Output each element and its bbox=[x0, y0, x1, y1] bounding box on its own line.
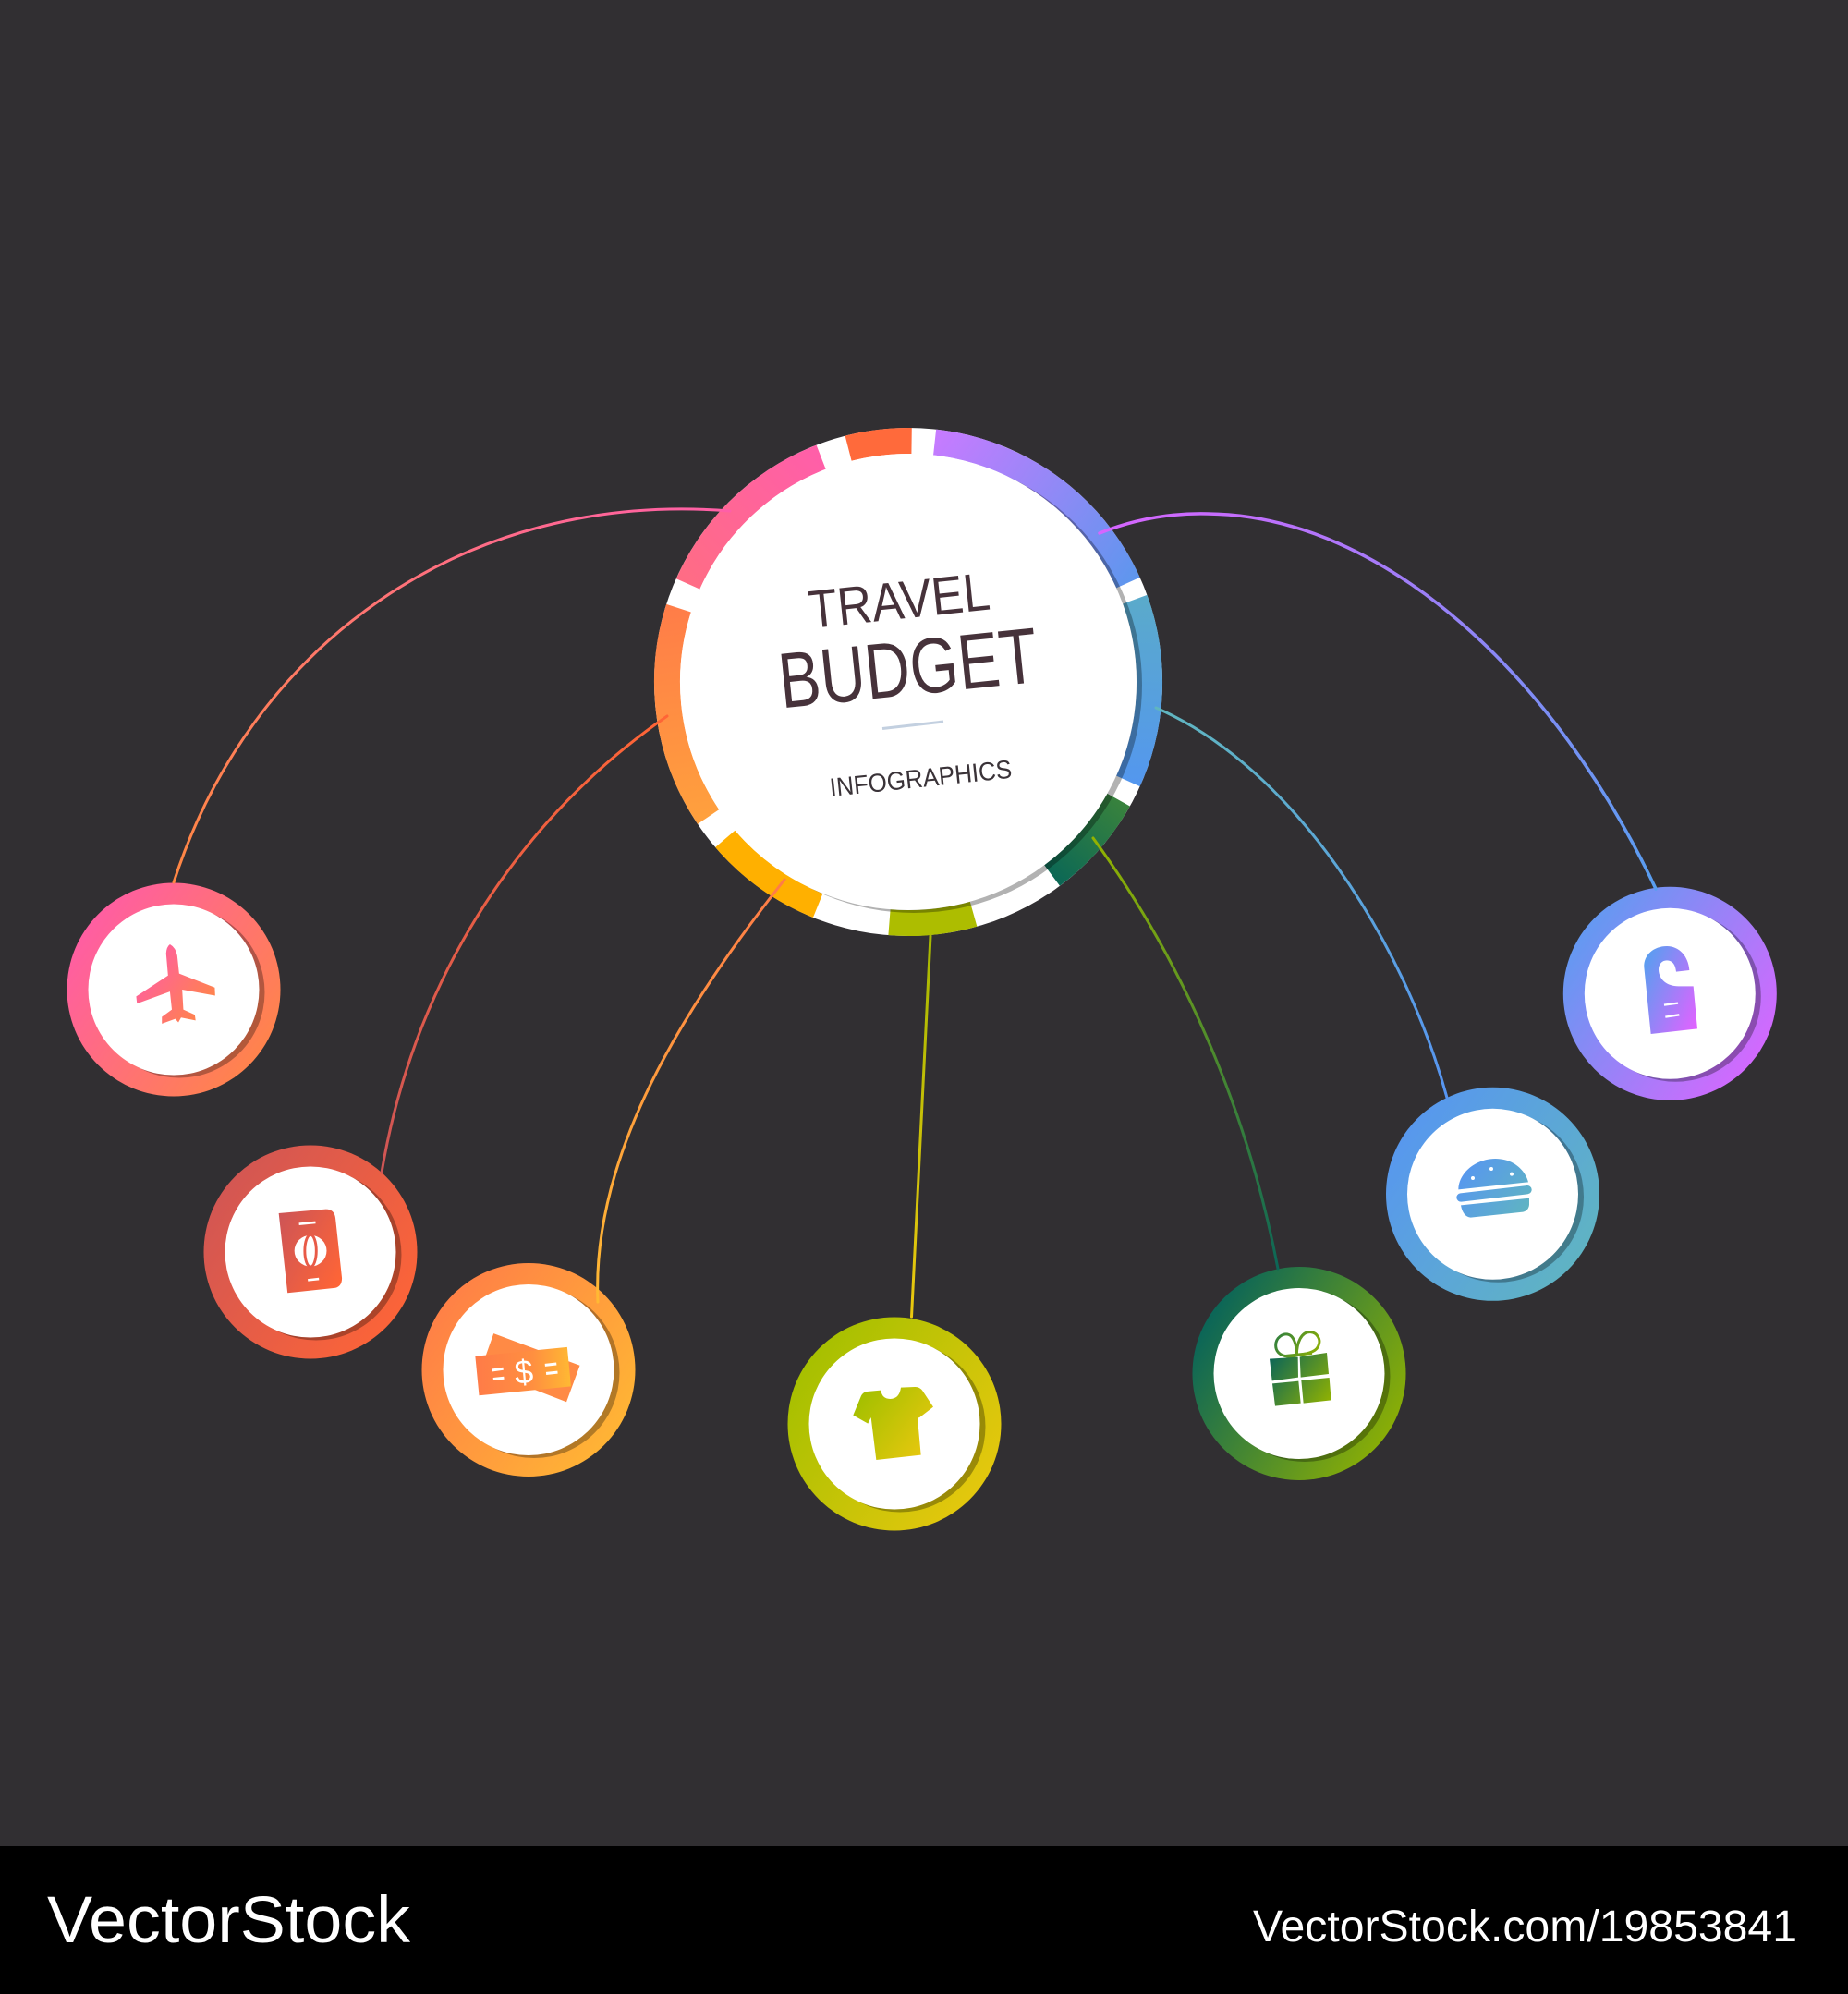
node disc bbox=[1407, 1109, 1578, 1280]
line: hub to gift bbox=[1093, 838, 1278, 1269]
node: burger bbox=[1386, 1088, 1599, 1301]
node disc bbox=[1214, 1288, 1384, 1459]
node: door hanger bbox=[1563, 887, 1777, 1100]
node shadow bbox=[94, 907, 264, 1077]
node ring bbox=[1563, 887, 1777, 1100]
node shadow bbox=[815, 1342, 985, 1512]
divider bbox=[882, 722, 943, 728]
footer image id: VectorStock.com/19853841 bbox=[1253, 1903, 1797, 1951]
node: passport bbox=[203, 1146, 418, 1358]
icon: banknotes bbox=[475, 1333, 580, 1402]
node disc bbox=[89, 904, 259, 1076]
node ring bbox=[787, 1318, 1002, 1530]
segment: orange bbox=[667, 608, 709, 817]
line: hub to passport bbox=[382, 716, 667, 1173]
segment: yellow bbox=[725, 839, 818, 906]
segment: purple bbox=[935, 443, 1128, 583]
line: hub to door hanger bbox=[1100, 514, 1656, 889]
icon: gift box bbox=[1270, 1332, 1331, 1406]
segment: green bbox=[1052, 800, 1119, 876]
footer bar bbox=[0, 1846, 1848, 1994]
dollar sign: $ bbox=[513, 1352, 535, 1392]
icon: airplane bbox=[136, 944, 215, 1024]
segment: lime bbox=[889, 914, 974, 923]
hub white base ring bbox=[654, 428, 1162, 936]
segment: blue bbox=[1128, 600, 1149, 781]
line: hub to money tickets bbox=[598, 880, 784, 1302]
node disc bbox=[1585, 908, 1756, 1079]
node ring bbox=[203, 1146, 418, 1358]
title: budget: BUDGET bbox=[774, 612, 1041, 725]
connector lines bbox=[174, 509, 1656, 1317]
node disc bbox=[444, 1284, 614, 1455]
footer background bbox=[0, 1846, 1848, 1994]
central hub: travel budget bbox=[654, 428, 1162, 936]
node disc bbox=[809, 1338, 979, 1510]
node ring bbox=[421, 1263, 636, 1477]
line: hub to airplane bbox=[174, 509, 730, 882]
hub ring segments bbox=[667, 441, 1149, 923]
icon: passport bbox=[279, 1210, 342, 1293]
node ring bbox=[1386, 1088, 1599, 1301]
title: travel: TRAVEL bbox=[806, 562, 992, 640]
line: hub to burger bbox=[1156, 708, 1447, 1098]
hub disc shadow bbox=[686, 456, 1142, 913]
node: t-shirt bbox=[787, 1318, 1002, 1530]
icon: t-shirt bbox=[853, 1387, 933, 1460]
footer logo: VectorStock bbox=[47, 1884, 411, 1957]
subtitle: infographics: INFOGRAPHICS bbox=[828, 755, 1014, 802]
segment: pink bbox=[688, 457, 821, 584]
node: money tickets bbox=[421, 1263, 636, 1477]
node: gift bbox=[1192, 1267, 1406, 1480]
segment: red-orange bbox=[848, 441, 912, 448]
icon: burger bbox=[1458, 1159, 1529, 1218]
node disc bbox=[225, 1166, 395, 1338]
node ring bbox=[67, 883, 281, 1096]
node ring bbox=[1192, 1267, 1406, 1480]
node: airplane bbox=[67, 883, 281, 1096]
node shadow bbox=[1590, 911, 1761, 1082]
node shadow bbox=[231, 1170, 401, 1340]
node shadow bbox=[1413, 1112, 1584, 1283]
node shadow bbox=[1220, 1291, 1390, 1462]
node shadow bbox=[449, 1287, 619, 1458]
icon: door hanger bbox=[1644, 946, 1697, 1034]
line: hub to t-shirt bbox=[911, 936, 930, 1317]
hub white disc bbox=[680, 454, 1137, 910]
